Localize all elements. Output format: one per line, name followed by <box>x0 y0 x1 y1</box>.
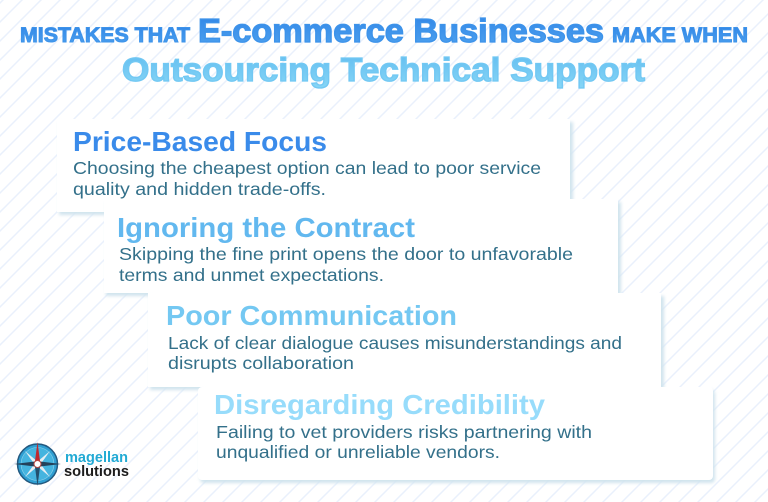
panel: disregarding credibility: Failing to vet providers risks partnering with <box>216 422 592 442</box>
logo: magellan solutions <box>14 442 129 486</box>
panel: poor communication <box>148 293 664 390</box>
panel: poor communication: Lack of clear dialogue causes misunderstandings and <box>168 333 622 353</box>
panel: price-based focus: Price-Based Focus <box>73 126 327 157</box>
panel: poor communication: disrupts collaboration <box>168 353 354 373</box>
panel: poor communication: Poor Communication <box>166 300 457 331</box>
panel: ignoring the contract: terms and unmet expectations. <box>119 265 384 285</box>
panel: disregarding credibility: Disregarding Credibility <box>214 389 546 420</box>
icon: compass <box>14 442 61 486</box>
logo: magellan solutions: solutions <box>64 464 129 480</box>
panel: disregarding credibility <box>198 387 715 483</box>
panel: ignoring the contract: Ignoring the Contract <box>117 212 415 243</box>
title: Outsourcing Technical Support <box>122 51 645 88</box>
panel: price-based focus: Choosing the cheapest option can lead to poor service <box>73 158 541 178</box>
panel: price-based focus <box>57 119 573 215</box>
panel: price-based focus: quality and hidden trade-offs. <box>73 179 326 199</box>
title: MAKE WHEN <box>612 24 748 47</box>
title: E-commerce Businesses <box>198 12 604 49</box>
logo: magellan solutions: magellan <box>65 450 128 466</box>
panel: ignoring the contract: Skipping the fine print opens the door to unfavorable <box>119 244 573 264</box>
title <box>20 12 748 88</box>
title: MISTAKES THAT <box>20 24 190 47</box>
panel: ignoring the contract <box>104 199 621 296</box>
panel: disregarding credibility: unqualified or unreliable vendors. <box>216 442 500 462</box>
